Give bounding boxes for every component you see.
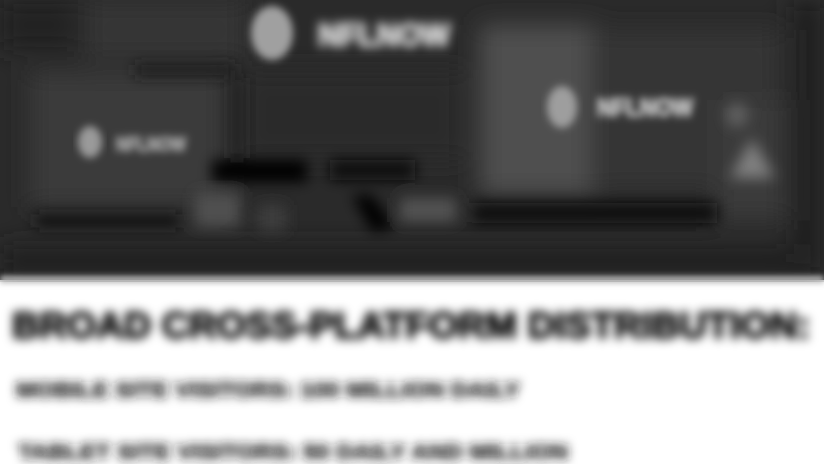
logo: right screen <box>547 86 693 128</box>
text line 2: TABLET SITE VISITORS: 50 DAILY AND MILLION <box>18 441 568 464</box>
logo wordmark right: NFLNOW <box>597 94 693 122</box>
icon: figure silhouette <box>726 103 775 178</box>
banner dark figures <box>35 64 717 232</box>
heading: BROAD CROSS-PLATFORM DISTRIBUTION: <box>12 305 810 346</box>
text line 1: MOBILE SITE VISITORS: 100 MILLION DAILY <box>16 379 520 402</box>
white text panel <box>0 276 824 464</box>
icon: logo emblem left <box>78 126 102 158</box>
banner shading blocks <box>0 0 824 278</box>
photo banner <box>0 0 824 280</box>
logo wordmark left: NFLNOW <box>116 134 186 156</box>
icon: logo emblem top <box>251 6 293 60</box>
logo wordmark top: NFLNOW <box>318 17 451 53</box>
logo: top centre <box>251 6 451 60</box>
icon: logo emblem right <box>547 86 577 128</box>
logo: left screen <box>78 126 186 158</box>
